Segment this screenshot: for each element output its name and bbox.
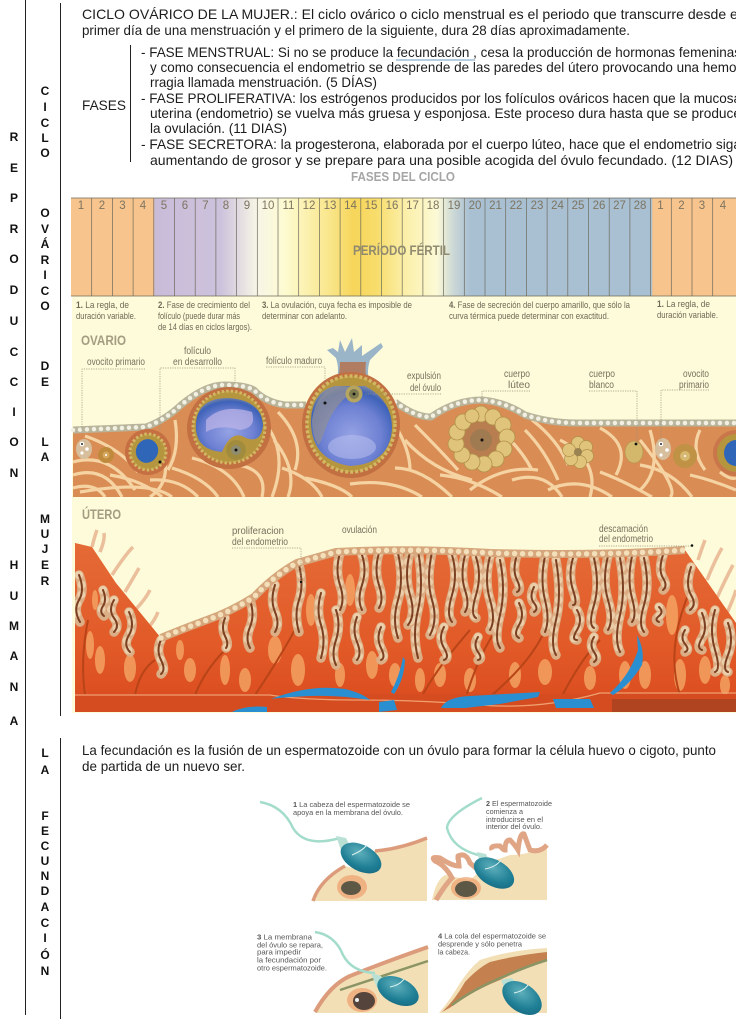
chart: cycle day strip: 3 (119, 200, 126, 212)
chart: cycle day strip: 20 (469, 200, 481, 212)
vertical title: ciclo ovárico de la mujer (40, 84, 50, 588)
fecundation definition text (82, 742, 716, 774)
illustration: fertilization step 2: introducirse en el (486, 815, 543, 824)
vertical title: ciclo ovárico de la mujer: I (43, 100, 47, 114)
vertical title: ciclo ovárico de la mujer: R (41, 253, 50, 267)
vertical title: ciclo ovárico de la mujer: M (40, 512, 50, 526)
chart: cycle day strip: 24 (551, 200, 564, 212)
illustration: fertilization step 4: la cabeza. (438, 948, 470, 956)
chart: cycle day strip: 4 (720, 200, 727, 212)
ovary labels and leader lines: expulsión (407, 371, 441, 382)
phase captions: determinar con adelanto. (262, 311, 347, 322)
chart: cycle day strip: 17 (406, 200, 419, 212)
vertical title: reproducción humana: I (12, 405, 16, 419)
chart: cycle day strip: 2 (678, 200, 685, 212)
chart: cycle day strip: 10 (262, 200, 274, 212)
vertical title: ciclo ovárico de la mujer: V (41, 222, 49, 236)
vertical title: reproducción humana: N (10, 466, 18, 480)
chart: cycle day strip: 22 (510, 200, 522, 212)
chart: cycle day strip: 7 (202, 200, 209, 212)
ovary labels and leader lines: del óvulo (410, 383, 441, 394)
chart: cycle day strip: 23 (531, 200, 543, 212)
intro paragraph (82, 6, 736, 38)
intro paragraph: CICLO OVÁRICO DE LA MUJER.: El ciclo ovárico o ciclo menstrual es el periodo que transcurre desde el (82, 6, 736, 22)
illustration: fertilization step 1: 1 La cabeza del espermatozoide se (293, 800, 410, 809)
phase captions: 4. Fase de secreción del cuerpo amarillo, que sólo la (449, 300, 631, 311)
ovary labels and leader lines: folículo maduro (266, 356, 322, 367)
phase captions (76, 299, 718, 333)
vertical title: reproducción humana: O (9, 435, 19, 449)
left vertical rules (26, 0, 60, 1019)
uterus labels and leader lines: descamación (599, 524, 648, 535)
vertical title: ciclo ovárico de la mujer: C (41, 84, 50, 98)
intro paragraph: primer día de una menstruación y el primero de la siguiente, dura 28 días aproximadamente. (82, 22, 630, 38)
uterus labels and leader lines (232, 524, 693, 583)
chart: cycle day strip: 4 (140, 200, 147, 212)
illustration: fertilization step 1 (260, 800, 427, 901)
panel: cream background (72, 296, 736, 713)
chart: cycle day strip: 12 (303, 200, 315, 212)
vertical title: ciclo ovárico de la mujer: R (41, 574, 50, 588)
vertical title: ciclo ovárico de la mujer: C (41, 116, 50, 130)
spiral arteries (82, 596, 688, 694)
fecundation definition text: de partida de un nuevo ser. (82, 758, 245, 774)
illustration: fertilization step 2: interior del óvulo. (486, 822, 542, 831)
vertical title: reproducción humana: O (9, 252, 19, 266)
chart: cycle day strip: 19 (448, 200, 460, 212)
vertical title: la fecundación: I (43, 931, 47, 945)
ovary labels and leader lines: primario (679, 380, 709, 391)
ovary labels and leader lines: ovocito primario (87, 357, 145, 368)
phase captions: 3. La ovulación, cuya fecha es imposible de (262, 300, 412, 311)
vertical title: la fecundación: L (41, 746, 49, 760)
chart: cycle day strip: 5 (161, 200, 167, 212)
vertical title: ciclo ovárico de la mujer: E (41, 375, 49, 389)
chart: cycle day strip: 28 (634, 200, 646, 212)
vertical title: reproducción humana: U (10, 589, 18, 603)
uterus labels and leader lines: del endometrio (232, 537, 288, 548)
corpus albicans (562, 436, 643, 468)
chart: cycle day strip: 15 (365, 200, 377, 212)
phase captions: curva térmica puede determinar con exactitud. (449, 311, 609, 322)
vertical title: ciclo ovárico de la mujer: O (40, 299, 50, 313)
vertical title: ciclo ovárico de la mujer: D (41, 359, 50, 373)
ovary labels and leader lines: blanco (589, 380, 614, 391)
vertical title: reproducción humana: R (10, 130, 19, 144)
vertical title: reproducción humana: P (10, 191, 18, 205)
vertical title: reproducción humana: R (10, 222, 19, 236)
vertical title: la fecundación: C (41, 839, 50, 853)
endometrium body (75, 543, 736, 712)
illustration: fertilization step 2: 2 El espermatozoide (486, 799, 552, 808)
chart: cycle day strip: 16 (386, 200, 398, 212)
vertical title: la fecundación: N (41, 869, 49, 883)
illustration: fertilization step 2: comienza a (486, 807, 523, 816)
vertical title: ciclo ovárico de la mujer: U (41, 527, 49, 541)
chart: cycle day strip: 14 (344, 200, 357, 212)
corpus luteum (448, 406, 515, 472)
vertical title: ciclo ovárico de la mujer: L (41, 435, 49, 449)
illustration: ovary cross-section (73, 338, 736, 497)
phase descriptions: aumentando de grosor y se prepare para una posible acogida del óvulo fecundado. (12 DIAS) (150, 152, 733, 168)
vertical title: la fecundación: F (41, 809, 49, 823)
vertical title: la fecundación: D (41, 884, 50, 898)
vertical title: la fecundación: C (41, 916, 50, 930)
right-hand oocytes and follicle (655, 430, 736, 476)
fases label and bracket: FASES (82, 97, 126, 113)
illustration: fertilization step 3: la fecundación por (257, 956, 322, 964)
illustration: fertilization step 3: para impedir (257, 948, 302, 956)
ovary labels and leader lines: en desarrollo (173, 357, 222, 368)
illustration: uterus endometrium (75, 530, 736, 712)
ovary labels and leader lines: folículo (184, 346, 211, 357)
ovary labels and leader lines: ovocito (683, 369, 709, 380)
ovary labels and leader lines (82, 346, 709, 442)
uterus labels and leader lines: del endometrio (599, 534, 653, 545)
chart: cycle day strip: 21 (489, 200, 502, 212)
vertical title: reproducción humana: A (10, 714, 19, 728)
vertical title: ciclo ovárico de la mujer: A (41, 450, 50, 464)
chart: cycle day strip: 25 (572, 200, 584, 212)
chart: cycle day strip: 6 (182, 200, 188, 212)
uterus labels and leader lines: proliferacion (232, 526, 284, 537)
illustration: fertilization step 2 (432, 798, 552, 900)
basal layer (84, 694, 728, 700)
phase descriptions: rragia llamada menstruación. (5 DÍAS) (150, 74, 377, 90)
pale capillary lobules (86, 574, 730, 695)
illustration: fertilization step 3: del óvulo se repara, (257, 940, 323, 950)
label: período fértil: PERÍODO FÉRTIL (353, 242, 450, 258)
vertical title: la fecundación: U (41, 854, 49, 868)
vertical title: la fecundación: A (41, 900, 50, 914)
vertical title: reproducción humana: M (9, 619, 19, 633)
developing follicle (187, 387, 271, 469)
vertical title: ciclo ovárico de la mujer: J (42, 542, 48, 556)
chart: cycle day strip: 11 (283, 200, 294, 212)
illustration: fertilization step 4 (438, 932, 548, 1022)
vertical title: ciclo ovárico de la mujer: L (41, 131, 49, 145)
vertical title: la fecundación: E (41, 824, 49, 838)
chart: cycle day strip (71, 198, 736, 296)
vertical title: ciclo ovárico de la mujer: C (41, 284, 50, 298)
chart: cycle day strip: 2 (99, 200, 105, 212)
vertical title: reproducción humana: U (10, 314, 18, 328)
vertical title: reproducción humana: N (10, 680, 18, 694)
vertical title: ciclo ovárico de la mujer: E (41, 558, 49, 572)
phase captions: de 14 días en ciclos largos). (158, 322, 252, 333)
illustration: fertilization step 4: 4 La cola del espermatozoide se (438, 932, 546, 940)
mature follicle and ovum expulsion (302, 338, 400, 478)
heading: fases del ciclo: FASES DEL CICLO (351, 169, 455, 184)
ovary tissue (73, 382, 736, 497)
vertical title: reproducción humana: C (10, 345, 19, 359)
chart: cycle day strip: 3 (699, 200, 705, 212)
vertical title: ciclo ovárico de la mujer: O (40, 146, 50, 160)
phase captions: 2. Fase de crecimiento del (158, 300, 250, 311)
phase descriptions: la ovulación. (11 DIAS) (150, 120, 287, 136)
heading: ovario: OVARIO (81, 333, 126, 348)
illustration: fertilization step 3 (257, 932, 428, 1013)
fases label and bracket (82, 45, 130, 162)
vertical title: ciclo ovárico de la mujer: O (40, 206, 50, 220)
phase captions: 1. La regla, de (76, 300, 129, 311)
small primary oocytes (76, 439, 114, 463)
chart: cycle day strip: 1 (78, 200, 84, 212)
fecundation definition text: La fecundación es la fusión de un espermatozoide con un óvulo para formar la célula huevo o cigoto, punto (82, 742, 716, 758)
phase captions: duración variable. (76, 311, 136, 322)
vertical title: reproducción humana: D (10, 283, 19, 297)
illustration: fertilization step 1: apoya en la membrana del óvulo. (293, 808, 403, 817)
illustration: fertilization step 3: 3 La membrana (257, 932, 312, 942)
vertical title: reproducción humana: C (10, 375, 19, 389)
phase captions: 1. La regla, de (657, 299, 710, 310)
ovary labels and leader lines: lúteo (508, 380, 530, 391)
shed tissue fringes (92, 530, 736, 628)
early follicle (125, 429, 171, 475)
vertical title: reproducción humana: E (10, 161, 18, 175)
vertical title: reproducción humana: H (10, 558, 18, 572)
chart: cycle day strip: 27 (613, 200, 626, 212)
epithelium beaded surface (73, 385, 736, 430)
heading: útero: ÚTERO (82, 507, 121, 522)
blue veins (232, 635, 643, 712)
phase captions: folículo (puede durar más (158, 311, 240, 322)
vertical title: la fecundación: Ó (40, 947, 50, 962)
chart: cycle day strip: 13 (324, 200, 336, 212)
glands: tissue, beads and lumen (76, 550, 731, 674)
vertical title: reproducción humana (9, 130, 19, 728)
vertical title: ciclo ovárico de la mujer: Á (41, 236, 50, 251)
illustration: fertilization step 3: otro espermatozoide. (257, 964, 327, 972)
vertical title: ciclo ovárico de la mujer: I (43, 268, 47, 282)
ovary labels and leader lines: cuerpo (504, 369, 530, 380)
ovary labels and leader lines: cuerpo (589, 369, 615, 380)
chart: cycle day strip: 8 (223, 200, 229, 212)
illustration: fertilization step 4: desprende y sólo penetra (438, 940, 522, 948)
phase descriptions (141, 44, 736, 168)
chart: cycle day strip: 1 (657, 200, 664, 212)
vertical title: reproducción humana: A (10, 649, 19, 663)
chart: cycle day strip: 26 (593, 200, 605, 212)
uterus labels and leader lines: ovulación (342, 525, 377, 536)
phase captions: duración variable. (657, 310, 718, 321)
chart: cycle day strip: 9 (244, 200, 250, 212)
beaded surface (161, 550, 685, 638)
chart: cycle day strip: 18 (427, 200, 439, 212)
vertical title: la fecundación: A (41, 763, 50, 777)
vertical title: la fecundación (40, 746, 50, 978)
vertical title: la fecundación: N (41, 964, 49, 978)
